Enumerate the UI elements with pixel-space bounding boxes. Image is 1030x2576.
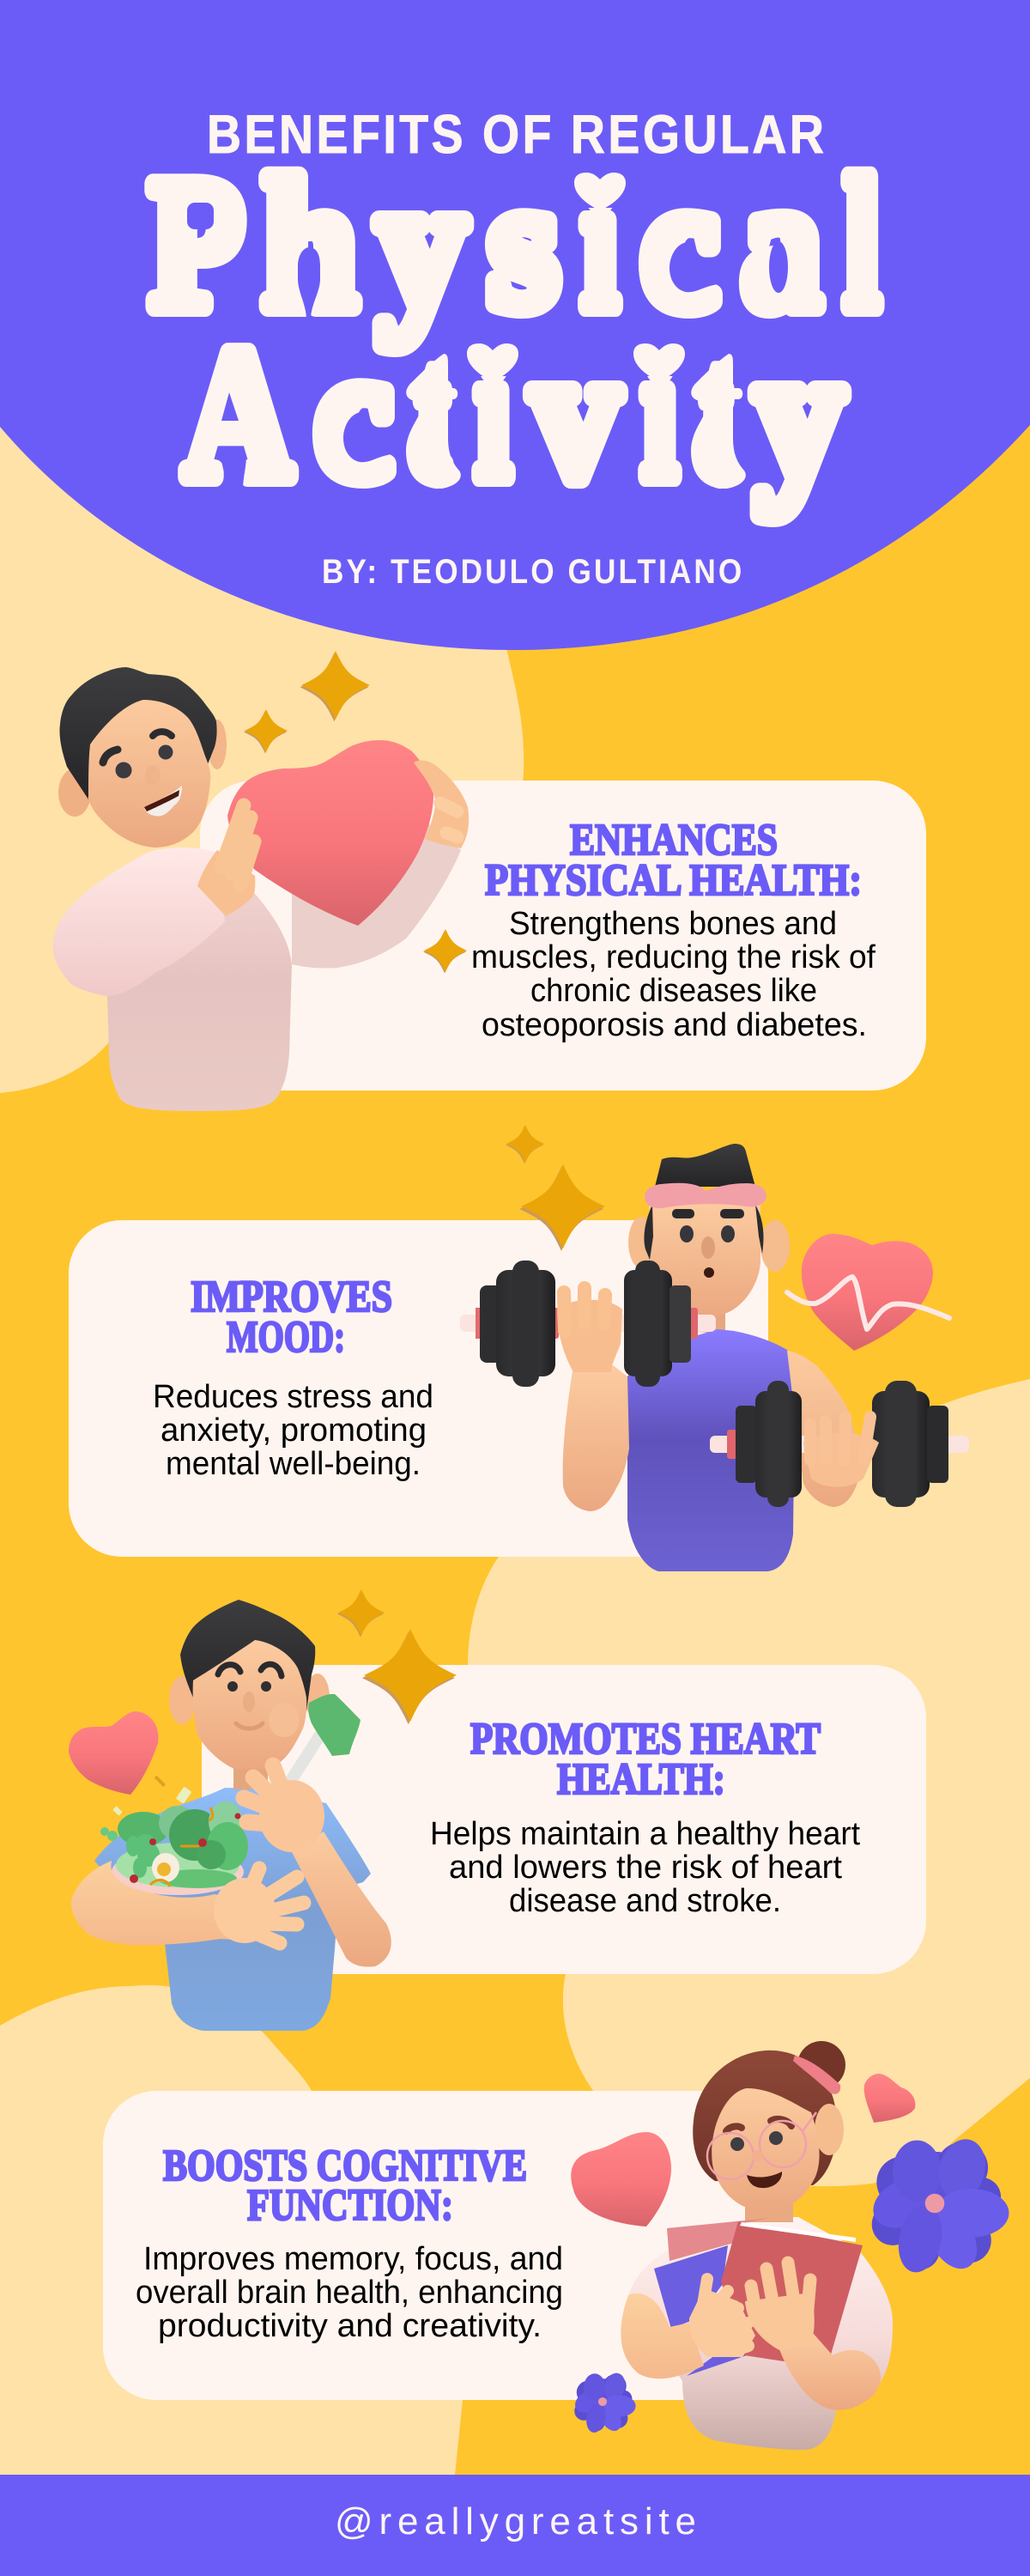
hand on lower dumbbell xyxy=(803,1417,879,1487)
body text: Helps maintain a healthy heart xyxy=(430,1816,860,1852)
title: Physical: l xyxy=(845,141,880,348)
nose xyxy=(752,2150,764,2162)
right arm xyxy=(787,1351,859,1507)
body text: muscles, reducing the risk of xyxy=(471,939,876,975)
sparkle small xyxy=(244,709,288,754)
heart with pulse xyxy=(787,1234,949,1351)
dumbbell upper xyxy=(460,1261,716,1387)
left arm xyxy=(621,2293,704,2379)
title: Activity: i xyxy=(642,311,677,518)
small heart xyxy=(864,2074,915,2123)
heading: BOOSTS COGNITIVE xyxy=(163,2142,527,2190)
heading xyxy=(485,816,862,905)
body text: disease and stroke. xyxy=(509,1883,781,1919)
headband xyxy=(645,1183,766,1208)
hand on arm xyxy=(214,1868,304,1943)
heading: ENHANCES xyxy=(570,816,778,865)
cheek xyxy=(269,1703,300,1737)
background blob: lower left xyxy=(0,1985,465,2475)
title: Activity: i xyxy=(476,311,511,518)
purple book xyxy=(654,2245,747,2376)
right hand xyxy=(414,761,469,848)
face xyxy=(193,1640,306,1769)
body text: Improves memory, focus, and xyxy=(143,2241,563,2277)
title: Activity: t xyxy=(701,311,731,518)
title details: letter counters xyxy=(187,155,788,491)
heading: MOOD: xyxy=(227,1313,345,1362)
far sleeve xyxy=(292,824,461,969)
body text: overall brain health, enhancing xyxy=(136,2275,563,2311)
eyes xyxy=(730,2131,783,2151)
small flower xyxy=(572,2371,636,2434)
dumbbell lower xyxy=(710,1381,969,1507)
subtitle: BENEFITS OF REGULAR xyxy=(207,104,824,165)
title: Activity: y xyxy=(755,311,844,518)
illustration: man lifting dumbbells xyxy=(460,1125,969,1571)
body text: Reduces stress and xyxy=(153,1379,433,1415)
heading: FUNCTION: xyxy=(247,2181,453,2230)
sparkle small xyxy=(337,1589,385,1637)
red book xyxy=(721,2221,863,2361)
heart xyxy=(69,1711,158,1795)
right arm xyxy=(779,2333,881,2410)
ear xyxy=(815,2104,844,2155)
panel: improves mood xyxy=(69,1220,768,1557)
title: Physical: y xyxy=(378,141,466,348)
right hand xyxy=(745,2263,815,2351)
card xyxy=(200,781,926,1091)
mouth xyxy=(704,1267,714,1278)
brows xyxy=(672,1209,744,1218)
byline: BY: TEODULO GULTIANO xyxy=(322,552,742,590)
right arm and hand xyxy=(244,1765,391,1967)
panel: enhances physical health xyxy=(200,781,926,1091)
torso xyxy=(107,850,292,1111)
heading xyxy=(163,2142,527,2230)
left hand xyxy=(197,805,255,916)
hair xyxy=(180,1600,315,1711)
title: Physical: h xyxy=(264,141,356,348)
bun xyxy=(797,2041,845,2089)
ears xyxy=(169,1674,330,1724)
neck xyxy=(233,1752,268,1789)
body text xyxy=(430,1816,860,1919)
sparkle small xyxy=(506,1125,544,1163)
side hair xyxy=(644,1205,763,1260)
footer bar xyxy=(0,2475,1030,2576)
hand on upper dumbbell xyxy=(557,1288,622,1372)
heading: IMPROVES xyxy=(191,1273,392,1321)
title: Physical: c xyxy=(642,141,718,348)
body text: anxiety, promoting xyxy=(161,1413,427,1449)
left arm xyxy=(563,1365,629,1511)
salad bowl xyxy=(100,1801,248,1895)
sparkle large xyxy=(519,1164,605,1251)
header panel xyxy=(0,0,1030,650)
scrunchie xyxy=(793,2056,840,2094)
background blob: right xyxy=(468,1379,1030,2186)
panel: boosts cognitive function xyxy=(103,2091,768,2400)
body text xyxy=(153,1379,433,1482)
glasses xyxy=(707,2112,816,2179)
title: Activity: v xyxy=(532,311,619,518)
illustration: woman with books xyxy=(571,2041,1009,2450)
sparkle on card xyxy=(423,929,467,974)
torso xyxy=(94,1788,371,2031)
fork with broccoli xyxy=(292,1694,360,1779)
illustration: man holding heart xyxy=(53,651,469,1111)
sparkle large xyxy=(362,1629,457,1724)
near sleeve xyxy=(53,848,225,996)
hair xyxy=(59,667,217,805)
background blob: upper left xyxy=(0,412,524,1093)
title: Physical: a xyxy=(742,141,821,348)
torso xyxy=(627,1329,795,1571)
face xyxy=(648,1202,760,1316)
ears xyxy=(628,1217,790,1272)
title: Activity: t xyxy=(416,311,449,518)
neck xyxy=(687,1301,725,1336)
heading xyxy=(470,1715,821,1804)
neck xyxy=(745,2198,793,2222)
face xyxy=(88,700,210,848)
heading: PHYSICAL HEALTH: xyxy=(485,856,862,905)
body text: chronic diseases like xyxy=(530,973,817,1009)
mouth xyxy=(747,2172,782,2188)
title: Activity: c xyxy=(316,311,391,518)
face xyxy=(712,2088,820,2211)
body text: productivity and creativity. xyxy=(158,2308,542,2344)
pink book xyxy=(667,2218,770,2261)
title: Activity: A xyxy=(185,311,292,518)
body text: osteoporosis and diabetes. xyxy=(482,1007,867,1043)
nose and smile xyxy=(236,1692,263,1728)
heart xyxy=(227,740,433,926)
title: Physical: s xyxy=(489,141,558,348)
card xyxy=(103,2091,768,2400)
sparkle large xyxy=(300,651,370,721)
body and shirt xyxy=(628,2217,893,2450)
large heart xyxy=(571,2132,671,2227)
right ear xyxy=(208,720,227,769)
heading xyxy=(191,1273,392,1362)
nose xyxy=(701,1236,715,1259)
illustration: man with salad xyxy=(69,1589,457,2031)
body text xyxy=(471,906,876,1043)
footer handle: @reallygreatsite xyxy=(335,2500,696,2543)
body text: mental well-being. xyxy=(166,1446,421,1482)
title: Physical: P xyxy=(150,141,243,348)
eyes and brows xyxy=(103,732,173,778)
left ear xyxy=(58,769,91,817)
heading: PROMOTES HEART xyxy=(470,1715,821,1764)
large flower xyxy=(865,2134,1009,2277)
salad flecks xyxy=(112,1776,192,1816)
arm with bowl xyxy=(71,1861,258,1945)
brows and eyes xyxy=(218,1664,282,1692)
heading: HEALTH: xyxy=(557,1755,725,1804)
body text xyxy=(136,2241,563,2344)
title: Physical: i xyxy=(582,141,618,348)
hair xyxy=(693,2050,837,2185)
card xyxy=(69,1220,768,1557)
body text: and lowers the risk of heart xyxy=(449,1850,842,1886)
hair xyxy=(655,1144,755,1187)
eyes xyxy=(680,1225,735,1242)
title decorations: heart dots and tall t stems xyxy=(406,173,746,489)
nose xyxy=(145,765,161,786)
left hand xyxy=(689,2279,755,2357)
panel: promotes heart health xyxy=(202,1665,926,1974)
mouth xyxy=(144,786,182,816)
card xyxy=(202,1665,926,1974)
body text: Strengthens bones and xyxy=(509,906,837,942)
brows xyxy=(726,2119,791,2131)
